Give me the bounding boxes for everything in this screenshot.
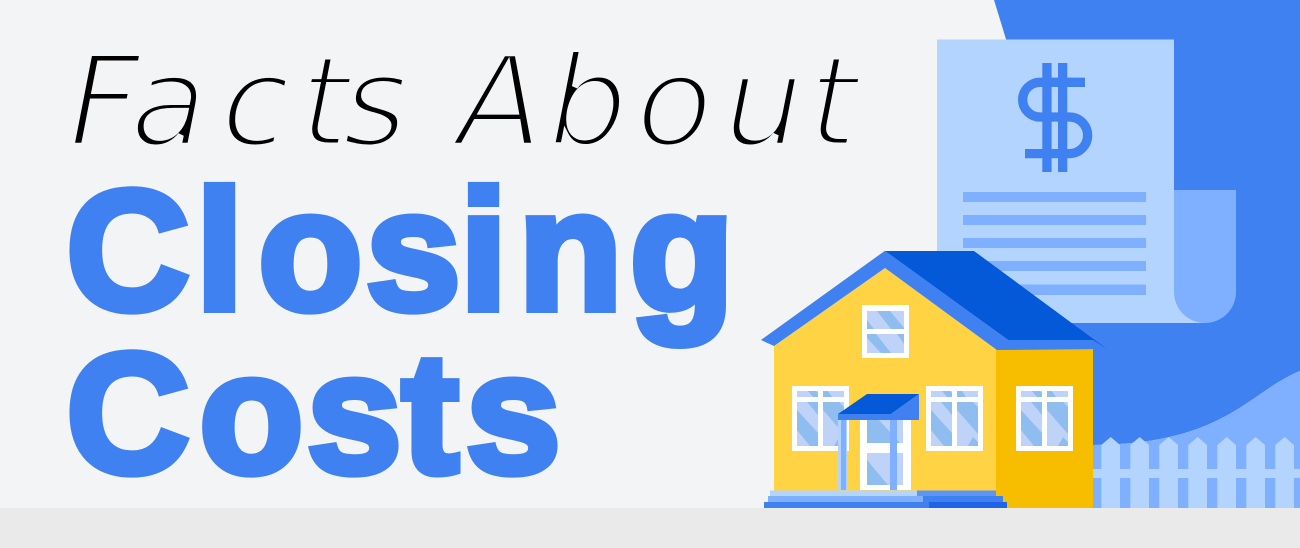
middle window [926,386,983,451]
document sheet [937,40,1205,323]
right window [1016,386,1073,451]
icon: invoice document with dollar sign [937,40,1236,323]
document curl [1150,190,1236,323]
house side wall [996,345,1093,508]
blue backdrop shape [994,0,1300,445]
left window [792,386,849,451]
house front wall [774,268,996,508]
upper window [862,305,909,358]
roof eave [761,251,1107,350]
porch roof [838,394,919,420]
main roof [885,251,1107,349]
icon: dollar sign [1023,63,1088,172]
document text lines [963,192,1146,295]
porch steps [764,490,1007,508]
icon: house [761,251,1107,508]
porch pillars [838,420,897,490]
ground strip [0,508,1300,548]
title: Closing: Closing [66,156,734,346]
title: Facts About: Facts About [68,28,862,176]
light blue hill [1092,371,1300,508]
title: Costs: Costs [66,319,561,509]
picket fence [1092,437,1300,508]
front door [860,420,911,490]
